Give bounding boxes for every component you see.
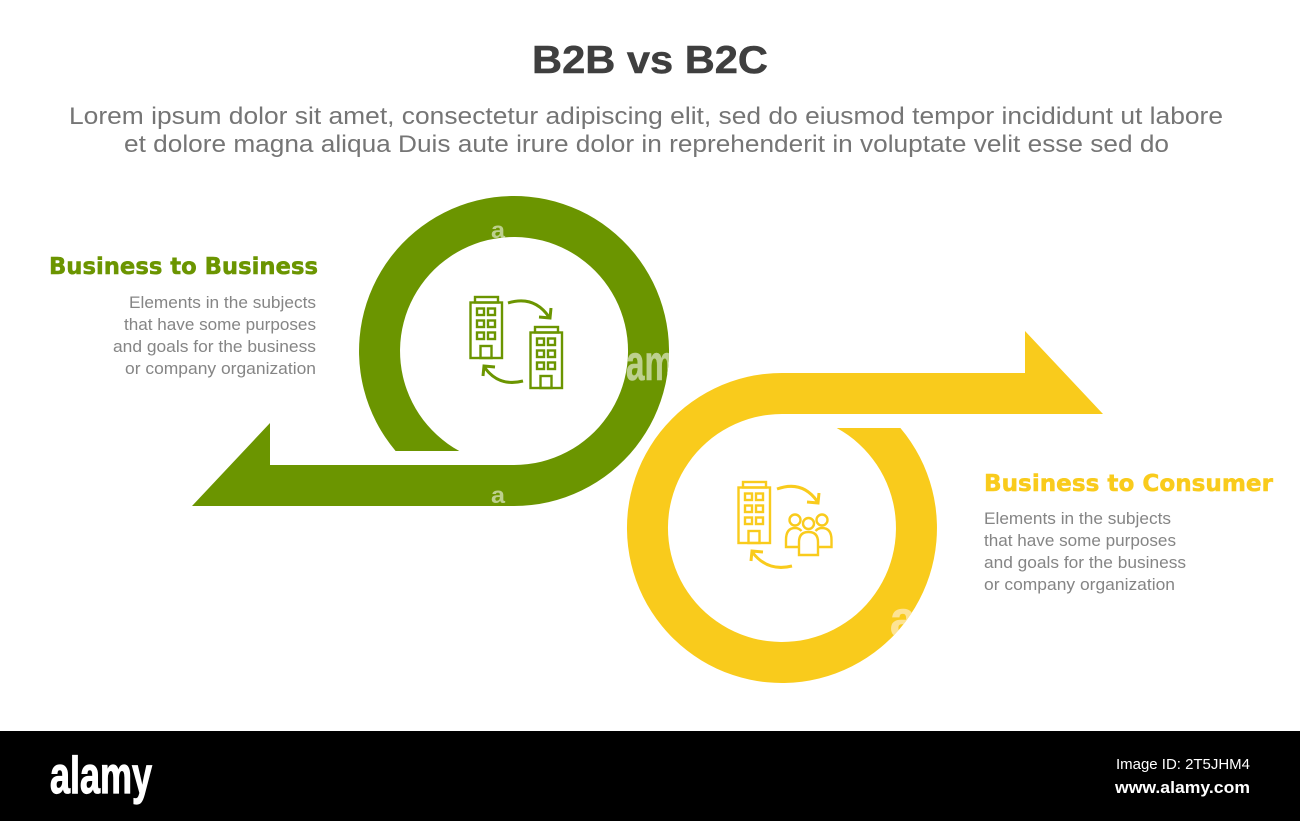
text: B2C description: that have some purposes	[984, 531, 1176, 550]
people	[786, 514, 832, 555]
text: B2B description	[113, 293, 316, 378]
text: B2C description: or company organization	[984, 575, 1175, 594]
text: B2B description: or company organization	[125, 359, 316, 378]
building right	[530, 327, 562, 388]
text: B2C description: and goals for the business	[984, 553, 1186, 572]
green looping arrow	[192, 196, 669, 506]
arrow top	[777, 486, 819, 503]
yellow looping arrow	[627, 331, 1103, 683]
arrow bottom	[483, 366, 523, 382]
watermark fragments green	[491, 217, 674, 508]
arrow bottom	[751, 551, 792, 567]
icon: building to consumers	[738, 482, 832, 567]
image id: Image ID: 2T5JHM4	[1116, 756, 1250, 773]
watermark fragment yellow: a	[890, 591, 917, 647]
intro text	[69, 103, 1223, 158]
watermark fragments green: a	[491, 217, 505, 243]
building	[738, 482, 770, 543]
arrow top	[508, 301, 551, 318]
website: www.alamy.com	[1114, 778, 1250, 797]
building left	[470, 297, 502, 358]
alamy logo: alamy	[50, 747, 152, 805]
title: B2B vs B2C	[532, 39, 768, 82]
watermark fragments green: a	[491, 482, 505, 508]
icon: two buildings exchanging	[470, 297, 562, 388]
text: B2B description: and goals for the business	[113, 337, 316, 356]
heading: Business to Consumer: Business to Consumer	[984, 471, 1274, 497]
watermark fragments green: am	[626, 335, 674, 391]
heading: Business to Business: Business to Business	[49, 254, 318, 280]
text: B2C description	[984, 509, 1186, 594]
intro text: et dolore magna aliqua Duis aute irure dolor in reprehenderit in voluptate velit esse sed do	[124, 131, 1169, 158]
text: B2B description: Elements in the subjects	[129, 293, 316, 312]
footer bar	[0, 731, 1300, 821]
text: B2B description: that have some purposes	[124, 315, 316, 334]
intro text: Lorem ipsum dolor sit amet, consectetur adipiscing elit, sed do eiusmod tempor incididunt ut labore	[69, 103, 1223, 130]
text: B2C description: Elements in the subjects	[984, 509, 1171, 528]
